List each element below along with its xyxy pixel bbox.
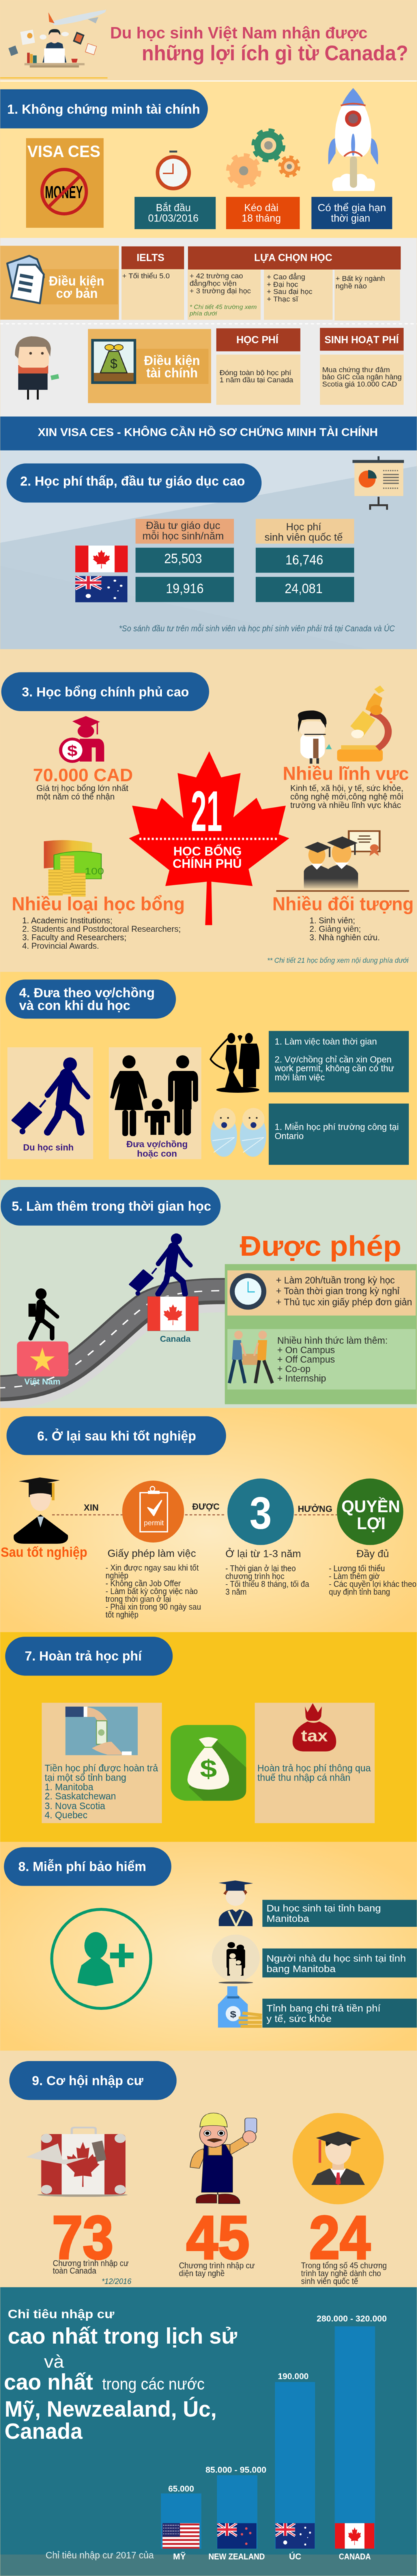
text block: many fields: Nhiều lĩnh vực (283, 764, 409, 785)
callout: Manitoba families: bang Manitoba (266, 1963, 336, 1974)
banner: no financial documents (0, 417, 417, 450)
panel: living costs (320, 328, 404, 405)
icon: presentation board (352, 456, 404, 510)
panel: tuition: 1 năm đầu tại Canada (220, 377, 294, 385)
icon: three years (227, 1478, 294, 1545)
panel: tuition: Đóng toàn bộ học phí (220, 369, 291, 377)
text block: many fields: trường và nhiều lĩnh vực khác (291, 800, 401, 810)
heading 8 (4, 1847, 171, 1886)
icon: work permit (122, 1481, 184, 1542)
panel: hours: + Toàn thời gian trong kỳ nghỉ (276, 1287, 400, 1297)
callout: spouse benefits: 1. Làm việc toàn thời gian (275, 1036, 377, 1047)
panel: section 4 bring family (0, 972, 417, 1180)
icon: flag Canada (147, 1296, 198, 1344)
icon: rocket (328, 88, 378, 191)
bar: Canada: 280.000 - 320.000 (317, 2314, 387, 2324)
callout: Manitoba students (263, 1900, 417, 1927)
icon: graduate (218, 1881, 253, 1926)
bar: USA (161, 2483, 201, 2561)
callout: start date (134, 197, 216, 229)
text block: work permit: trong thời gian ở lại (106, 1595, 171, 1604)
icon: traveller with suitcase (130, 1233, 191, 1296)
text: after graduating: Sau tốt nghiệp (1, 1545, 87, 1560)
panel: provincial refund: 4. Quebec (44, 1810, 88, 1821)
text block: levels: + Sau đại học (267, 288, 313, 296)
text block: many audiences: 3. Nhà nghiên cứu. (309, 933, 380, 943)
heading 8: 8. Miễn phí bảo hiểm (18, 1859, 146, 1875)
text block: stay period: Ở lại từ 1-3 năm (225, 1547, 301, 1560)
icon: flag Vietnam: Việt Nam (24, 1377, 61, 1386)
icon: tax bag: tax (301, 1727, 328, 1746)
bar: New Zealand: 85.000 - 95.000 (205, 2465, 266, 2475)
text block: full rights: Đầy đủ (356, 1549, 389, 1560)
text block: work permit: - Phải xin trong 90 ngày sau (106, 1603, 201, 1612)
text block: many fields: công nghệ mới,công nghệ môi (291, 793, 403, 802)
text block: highest targets: cao nhất (4, 2370, 93, 2395)
text block: stay period: chương trình học (225, 1572, 284, 1581)
stat: 24 student programmes (301, 2203, 387, 2286)
stat: scholarship value (33, 765, 133, 802)
icon: graduate in circle (293, 2113, 384, 2204)
table: investment and tuition: 25,503 (164, 551, 202, 566)
icon: backpacker (29, 1288, 57, 1338)
panel: provincial refund: 3. Nova Scotia (44, 1800, 106, 1811)
panel: student (7, 1047, 93, 1159)
icon: worker (190, 2113, 257, 2204)
text block: work permit: nghiệp (106, 1572, 128, 1581)
table: investment and tuition: sinh viên quốc tế (265, 532, 343, 543)
bar: New Zealand (205, 2465, 266, 2561)
text block: work permit: Giấy phép làm việc (108, 1549, 196, 1560)
text block: many scholarship types: 3. Faculty and Researchers; (22, 933, 126, 943)
header (0, 0, 417, 82)
stat: 73 programmes: Chương trình nhập cư (53, 2259, 129, 2268)
panel: conditions (0, 238, 417, 417)
text block: majors (336, 275, 385, 290)
icon: work permit: permit (144, 1519, 164, 1527)
text block: highest targets (4, 2308, 237, 2444)
panel: provincial refund: tại một số tỉnh bang (44, 1772, 126, 1783)
icon: stopwatch (156, 151, 191, 190)
panel: provincial refund: 1. Manitoba (44, 1781, 94, 1793)
heading 5: 5. Làm thêm trong thời gian học (12, 1200, 211, 1214)
callout: start date: 01/03/2016 (148, 213, 199, 224)
panel: tuition: HỌC PHÍ (237, 335, 279, 346)
text block: full rights: - Làm thêm giờ (329, 1572, 380, 1581)
panel: family: Đưa vợ/chồng (126, 1139, 188, 1149)
icon: family medallion (212, 1935, 260, 1983)
panel: financial conditions (88, 329, 211, 403)
callout: Manitoba families (263, 1948, 417, 1978)
icon: money and coins (44, 840, 104, 897)
icon: couple (210, 1033, 259, 1092)
stat: scholarship value: Giá trị học bổng lớn nhất (36, 783, 129, 793)
text block: highest targets: trong các nước (102, 2375, 205, 2393)
icon: rights (337, 1478, 403, 1545)
text block: schools: * Chi tiết 45 trường xem (190, 304, 257, 311)
panel: section 6 stay after graduation (0, 1408, 417, 1632)
icon: scientist and microscope (298, 686, 388, 764)
heading 4 (5, 980, 176, 1019)
callout: duration (226, 197, 300, 229)
bar: USA: MỸ (173, 2551, 186, 2561)
icon: blue money bag (218, 1986, 262, 2028)
text block: many scholarship types: 1. Academic Institutions; (22, 916, 113, 926)
icon: flag Australia (76, 576, 128, 602)
callout: children benefits (268, 1104, 409, 1165)
callout: province pays (263, 1998, 417, 2028)
text block: many audiences: 1. Sinh viên; (309, 916, 355, 926)
icon: three years: 3 (250, 1487, 272, 1538)
bar: Canada: CANADA (339, 2551, 371, 2561)
callout: spouse benefits: work permit, không cần có thư (274, 1063, 394, 1074)
icon: road (0, 1290, 229, 1396)
chart: maple leaf 21 scholarships: 21 (191, 779, 222, 843)
bar: New Zealand: NEW ZEALAND (208, 2551, 265, 2561)
chart: maple leaf 21 scholarships: HỌC BỔNG (173, 844, 242, 858)
text block: work permit: - Không cần Job Offer (106, 1579, 181, 1588)
text block: highest targets: Canada (5, 2420, 83, 2444)
heading 9 (9, 2061, 177, 2100)
banner: no financial documents: XIN VISA CES - KHÔNG CẦN HỒ SƠ CHỨNG MINH TÀI CHÍNH (38, 425, 378, 439)
panel: basic conditions: cơ bản (56, 286, 98, 301)
panel: IELTS: IELTS (137, 253, 164, 264)
panel: section 9 immigration (0, 2051, 417, 2287)
text block: work permit: - Làm bất kỳ công việc nào (106, 1587, 198, 1596)
heading 3: 3. Học bổng chính phủ cao (22, 685, 189, 699)
panel: hours: + Làm 20h/tuần trong kỳ học (276, 1276, 395, 1286)
table: investment and tuition: 19,916 (165, 581, 203, 596)
icon: two people with box (229, 1331, 272, 1383)
text block: work permit (106, 1549, 201, 1620)
text block: schools (189, 272, 257, 317)
icon: person plus (51, 1909, 151, 2008)
callout: renewable (311, 197, 392, 229)
panel: tuition (216, 329, 300, 405)
heading 4: và con khi du học (19, 999, 130, 1013)
callout: Manitoba families: Người nhà du học sinh tại tỉnh (266, 1953, 406, 1964)
stat: 73 programmes: *12/2016 (102, 2277, 132, 2286)
stat: 24 student programmes: trình tay nghề dành cho (301, 2269, 381, 2278)
stat: 45 skilled programmes: Chương trình nhập cư (179, 2261, 255, 2270)
panel: hours: + Thủ tục xin giấy phép đơn giản (276, 1297, 412, 1308)
panel: provincial refund: Tiền học phí được hoàn trả (44, 1763, 158, 1774)
heading 1: 1. Không chứng minh tài chính (7, 103, 200, 117)
text block: levels: + Cao đẳng (267, 273, 305, 282)
icon: money bag app (171, 1725, 246, 1801)
callout: spouse benefits: 2. Vợ/chồng chỉ cần xin Open (275, 1054, 392, 1064)
text block: stay period: - Thời gian ở lại theo (225, 1564, 296, 1573)
stat: 24 student programmes: sinh viên quốc tế (301, 2277, 358, 2286)
panel: tax refund: Hoàn trả học phí thông qua (257, 1763, 371, 1774)
callout: Manitoba students: Manitoba (266, 1913, 309, 1924)
panel: hours (227, 1270, 416, 1315)
panel: visa CES (26, 138, 104, 228)
text block: majors: nghề nào (336, 282, 367, 290)
title (110, 24, 408, 65)
icon: graduate with coin (59, 716, 104, 763)
panel: tax refund: thuế thu nhập cá nhân (257, 1772, 351, 1783)
icon: rights: QUYỀN (341, 1497, 400, 1516)
stat: 45 skilled programmes: 45 (186, 2203, 250, 2272)
text block: highest targets: Mỹ, Newzealand, Úc, (5, 2397, 216, 2422)
panel: family: hoặc con (137, 1148, 177, 1158)
label: receive: ĐƯỢC (192, 1501, 220, 1512)
panel: work types: + Co-op (278, 1364, 310, 1375)
icon: plane and office worker (8, 10, 106, 68)
table: investment and tuition: mỗi học sinh/năm (142, 530, 224, 542)
icon: documents (7, 256, 44, 303)
text block: many fields: Kinh tế, xã hội, y tế, sức khỏe, (291, 783, 403, 793)
panel: family (109, 1047, 201, 1159)
title: Du học sinh Việt Nam nhận được (110, 24, 367, 42)
icon: man with money (15, 336, 59, 400)
text block: stay period (225, 1547, 309, 1597)
panel: visa CES: VISA CES (27, 143, 100, 161)
text block: many audiences: 2. Giảng viên; (309, 925, 361, 934)
icon: hands with banknote (65, 1706, 137, 1755)
callout: duration: 18 tháng (242, 213, 281, 224)
text block: schools: đẳng/học viện (190, 280, 237, 288)
heading 6: 6. Ở lại sau khi tốt nghiệp (37, 1428, 196, 1444)
bar: Australia: 190.000 (278, 2371, 309, 2381)
panel: immigration targets (0, 2287, 417, 2576)
panel: provincial refund (42, 1703, 162, 1823)
text block: levels: + Thạc sĩ (267, 295, 298, 303)
heading 7 (5, 1637, 173, 1676)
callout: province pays: Tỉnh bang chi trả tiền phí (266, 2003, 381, 2014)
heading 3 (1, 672, 209, 711)
text block: full rights (329, 1549, 416, 1597)
icon: traveller (12, 1057, 87, 1134)
icon: graduate with coin: $ (67, 742, 78, 759)
table: investment and tuition: 24,081 (285, 581, 323, 596)
bar chart: immigration targets 2017 (161, 2314, 387, 2561)
chart: maple leaf 21 scholarships: CHÍNH PHỦ (173, 857, 242, 871)
stat: scholarship value: một năm có thể nhận (36, 793, 115, 802)
title: những lợi ích gì từ Canada? (142, 42, 408, 65)
panel: section 2 tuition comparison (0, 450, 417, 649)
stat: scholarship value: 70.000 CAD (33, 765, 133, 785)
callout: children benefits: 1. Miễn học phí trường công tại (275, 1121, 399, 1132)
panel: financial conditions: tài chính (146, 366, 198, 381)
stat: 73 programmes: 73 (52, 2203, 113, 2272)
bar: USA: 65.000 (168, 2483, 194, 2493)
stat: 24 student programmes: 24 (309, 2203, 370, 2272)
text block: schools: phía dưới (189, 310, 218, 317)
text block: levels (267, 273, 313, 303)
text block: stay period: 3 năm (225, 1588, 246, 1597)
icon: money bag picture (93, 340, 135, 383)
text block: work permit: - Xin được ngay sau khi tốt (106, 1564, 199, 1573)
panel: section 7 tuition refund (0, 1632, 417, 1842)
text block: full rights: - Lương tối thiểu (329, 1564, 385, 1573)
panel: section 1 no financial proof (0, 81, 417, 238)
icon: tax bag (293, 1703, 336, 1751)
icon: rights: LỢI (357, 1514, 386, 1533)
panel: section 5 part-time work (0, 1180, 417, 1408)
panel: IELTS (121, 246, 184, 320)
heading 5 (1, 1187, 221, 1225)
icon: gears (228, 130, 298, 186)
table: investment and tuition: Học phí (286, 521, 322, 533)
stat: 73 programmes: toàn Canada (53, 2266, 96, 2276)
panel: living costs: Scotia giá 10.000 CAD (322, 381, 397, 388)
panel: tax refund (255, 1703, 375, 1823)
icon: flag Canada (76, 546, 128, 572)
footnote: ** Chi tiết 21 học bổng xem nội dung phía dưới (267, 957, 409, 965)
panel: work types: Nhiều hình thức làm thêm: (278, 1336, 388, 1347)
callout: spouse benefits (268, 1031, 409, 1092)
panel: basic conditions (0, 246, 119, 319)
stat: 45 skilled programmes: diện tay nghề (179, 2269, 225, 2278)
table: investment and tuition: 16,746 (285, 553, 323, 568)
text block: schools: + 42 trường cao (190, 272, 243, 280)
callout: renewable: thời gian (331, 213, 370, 224)
heading: allowed: Được phép (240, 1231, 401, 1263)
panel: living costs: bảo GIC của ngân hàng (322, 373, 401, 381)
panel: living costs: SINH HOẠT PHÍ (324, 335, 399, 346)
chart: maple leaf 21 scholarships (129, 752, 289, 925)
panel: work permissions (225, 1264, 417, 1404)
text block: many scholarship types: 2. Students and Postdoctoral Researchers; (22, 925, 180, 934)
heading 4: 4. Đưa theo vợ/chồng (19, 986, 154, 1001)
panel: study options: LỰA CHỌN HỌC (254, 253, 332, 264)
heading 7: 7. Hoàn trả học phí (25, 1650, 143, 1664)
text block: majors: + Bất kỳ ngành (336, 275, 385, 283)
icon: babies (210, 1108, 266, 1157)
text block: highest targets: cao nhất trong lịch sử (8, 2324, 237, 2349)
text block: many audiences (272, 894, 414, 943)
text block: levels: + Đại học (267, 281, 298, 289)
text block: highest targets: Chỉ tiêu nhập cư (8, 2308, 115, 2321)
panel: work types: + Internship (278, 1373, 326, 1384)
footnote: *So sánh đầu tư trên mỗi sinh viên và học phí sinh viên phải trả tại Canada và ÚC (119, 623, 395, 633)
label: enjoy: HƯỞNG (298, 1502, 332, 1514)
panel: visa CES: MONEY (45, 183, 83, 202)
panel: IELTS: + Tối thiểu 5.0 (122, 272, 169, 280)
bar: Australia (275, 2371, 315, 2561)
heading 9: 9. Cơ hội nhập cư (32, 2074, 144, 2088)
heading 2: 2. Học phí thấp, đầu tư giáo dục cao (20, 475, 245, 489)
table: investment and tuition: Đầu tư giáo dục (146, 521, 220, 532)
text block: work permit: tốt nghiệp (106, 1611, 139, 1620)
panel: financial conditions: Điều kiện (144, 353, 200, 368)
icon: family (110, 1055, 198, 1136)
callout: children benefits: Ontario (275, 1130, 304, 1141)
callout: Manitoba students: Du học sinh tại tỉnh bang (266, 1903, 381, 1914)
text block: highest targets: và (44, 2351, 65, 2371)
table: investment and tuition (136, 519, 354, 602)
icon: graduates and certificate (304, 831, 380, 888)
text block: many scholarship types: Nhiều loại học bổng (12, 894, 185, 915)
callout: start date: Bắt đầu (156, 203, 191, 214)
stat: 24 student programmes: Trong tổng số 45 chương (301, 2261, 387, 2270)
text block: many audiences: Nhiều đối tượng (272, 894, 414, 915)
panel: provincial refund: 2. Saskatchewan (44, 1791, 116, 1802)
callout: duration: Kéo dài (244, 203, 278, 214)
icon: flag Vietnam (17, 1341, 68, 1386)
panel: work types: + On Campus (278, 1345, 335, 1356)
text block: schools: + 3 trường đại học (190, 287, 252, 295)
label: apply: XIN (83, 1502, 99, 1512)
text block: full rights: quy định tỉnh bang (329, 1588, 390, 1597)
icon: graduate (14, 1478, 68, 1544)
icon: blue money bag: $ (230, 2010, 237, 2020)
heading 1 (0, 89, 208, 128)
callout: spouse benefits: mời làm việc (275, 1072, 324, 1082)
panel: work types (227, 1329, 416, 1390)
panel: work types: + Off Campus (278, 1354, 335, 1365)
panel: section 3 scholarships (0, 649, 417, 972)
icon: money bag picture: $ (110, 357, 117, 372)
icon: flag Canada: Canada (160, 1334, 191, 1344)
icon: money bag app: $ (200, 1755, 217, 1783)
panel: living costs: Mua chứng thư đảm (322, 366, 390, 374)
panel: student: Du học sinh (23, 1142, 74, 1152)
callout: renewable: Có thể gia hạn (318, 203, 386, 214)
bar: Australia: ÚC (289, 2551, 302, 2561)
heading 6 (7, 1416, 226, 1455)
callout: province pays: y tế, sức khỏe (266, 2013, 332, 2025)
text block: stay period: - Tối thiểu 8 tháng, tối đa (225, 1580, 309, 1589)
heading 2 (7, 463, 262, 503)
axis caption: Chỉ tiêu nhập cư 2017 của (46, 2551, 154, 2561)
bar: Canada (317, 2314, 387, 2561)
text block: many scholarship types (12, 894, 185, 950)
panel: basic conditions: Điều kiện (49, 274, 104, 289)
text block: many fields (283, 764, 409, 810)
icon: money and coins: 100 (85, 866, 104, 877)
text block: many scholarship types: 4. Provincial Awards. (22, 941, 99, 950)
icon: Canada suitcase (26, 2128, 128, 2197)
panel: study options (188, 246, 401, 321)
panel: section 8 free insurance (0, 1842, 417, 2051)
